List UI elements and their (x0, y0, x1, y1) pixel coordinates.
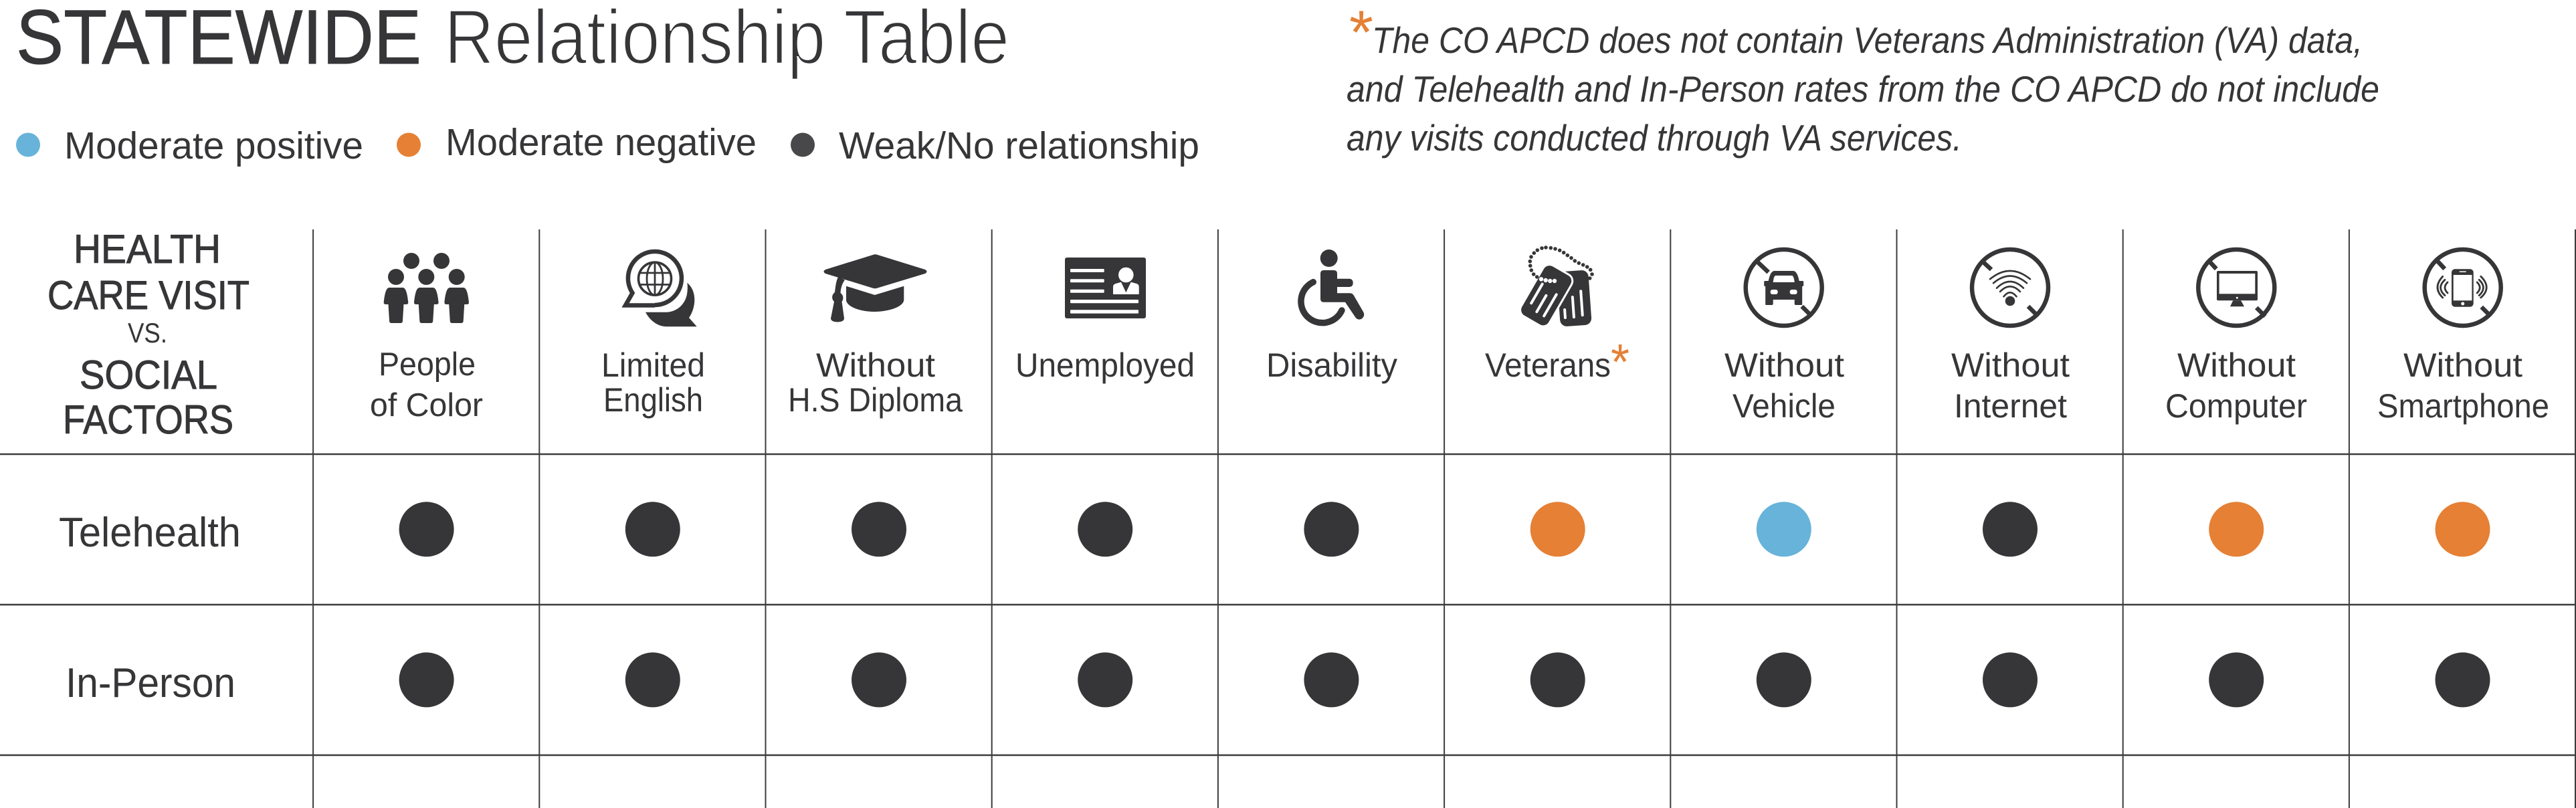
row/column axis heading: SOCIAL (80, 352, 217, 397)
relationship dots: telehealth (399, 502, 2490, 557)
label: without internet: Without (1951, 346, 2070, 384)
label: without smartphone: Without (2403, 346, 2522, 384)
icon: without computer (2198, 249, 2274, 326)
label: disability: Disability (1266, 346, 1397, 384)
label: limited english: Limited (601, 346, 705, 384)
icon: graduation cap (824, 254, 927, 322)
label: veterans: Veterans (1485, 346, 1611, 384)
row/column axis heading: CARE VISIT (47, 273, 250, 318)
row label: in-person: In-Person (66, 660, 235, 706)
label: without smartphone (2377, 346, 2549, 425)
label: without computer: Without (2177, 346, 2296, 384)
label: without vehicle: Vehicle (1732, 387, 1836, 425)
row/column axis heading (47, 227, 250, 442)
label: without smartphone: Smartphone (2377, 387, 2549, 425)
legend: moderate negative: Moderate negative (445, 121, 757, 164)
footnote: and Telehealth and In-Person rates from the CO APCD do not include (1347, 68, 2379, 110)
label: without h.s diploma (788, 346, 963, 419)
icon: without smartphone (2425, 249, 2501, 326)
label: limited english (601, 346, 705, 419)
relationship dots: in-person (399, 652, 2490, 707)
label: without h.s diploma: Without (816, 346, 935, 384)
legend (16, 121, 1199, 167)
row label: telehealth: Telehealth (59, 510, 241, 556)
label: people of color: of Color (370, 387, 483, 423)
label: without computer (2165, 346, 2307, 425)
row: telehealth (59, 502, 2490, 557)
footnote: The CO APCD does not contain Veterans Administration (VA) data, (1372, 19, 2363, 61)
title (16, 0, 1009, 80)
label: without vehicle: Without (1724, 346, 1844, 384)
row/column axis heading: FACTORS (63, 397, 233, 442)
label: without internet: Internet (1954, 387, 2067, 425)
legend: moderate positive: Moderate positive (64, 124, 363, 167)
icon: without vehicle (1746, 249, 1822, 326)
table grid (0, 229, 2576, 808)
legend: weak or no relationship: Weak/No relationship (839, 124, 1199, 167)
label: veterans: * (1611, 334, 1629, 390)
label: people of color: People (379, 346, 476, 383)
icon: employment id card (1065, 258, 1146, 318)
label: veterans (1485, 334, 1629, 390)
label: without vehicle (1724, 346, 1844, 425)
label: without computer: Computer (2165, 387, 2307, 425)
label: without h.s diploma: H.S Diploma (788, 381, 963, 419)
footnote (1347, 0, 2379, 159)
label: unemployed: Unemployed (1015, 346, 1195, 384)
icon: without internet (1972, 249, 2048, 326)
icon: dog tags (1518, 245, 1594, 329)
row/column axis heading: HEALTH (74, 227, 221, 272)
label: limited english: English (603, 381, 703, 419)
icon: wheelchair (1301, 249, 1364, 323)
row/column axis heading: VS. (128, 317, 167, 348)
footnote: * (1349, 0, 1373, 67)
label: people of color (370, 346, 483, 423)
footnote: any visits conducted through VA services. (1347, 117, 1962, 159)
label: without internet (1951, 346, 2070, 425)
row: in-person (66, 652, 2490, 707)
icon: limited english speech bubbles (625, 251, 697, 326)
icon: people of color (384, 253, 469, 323)
